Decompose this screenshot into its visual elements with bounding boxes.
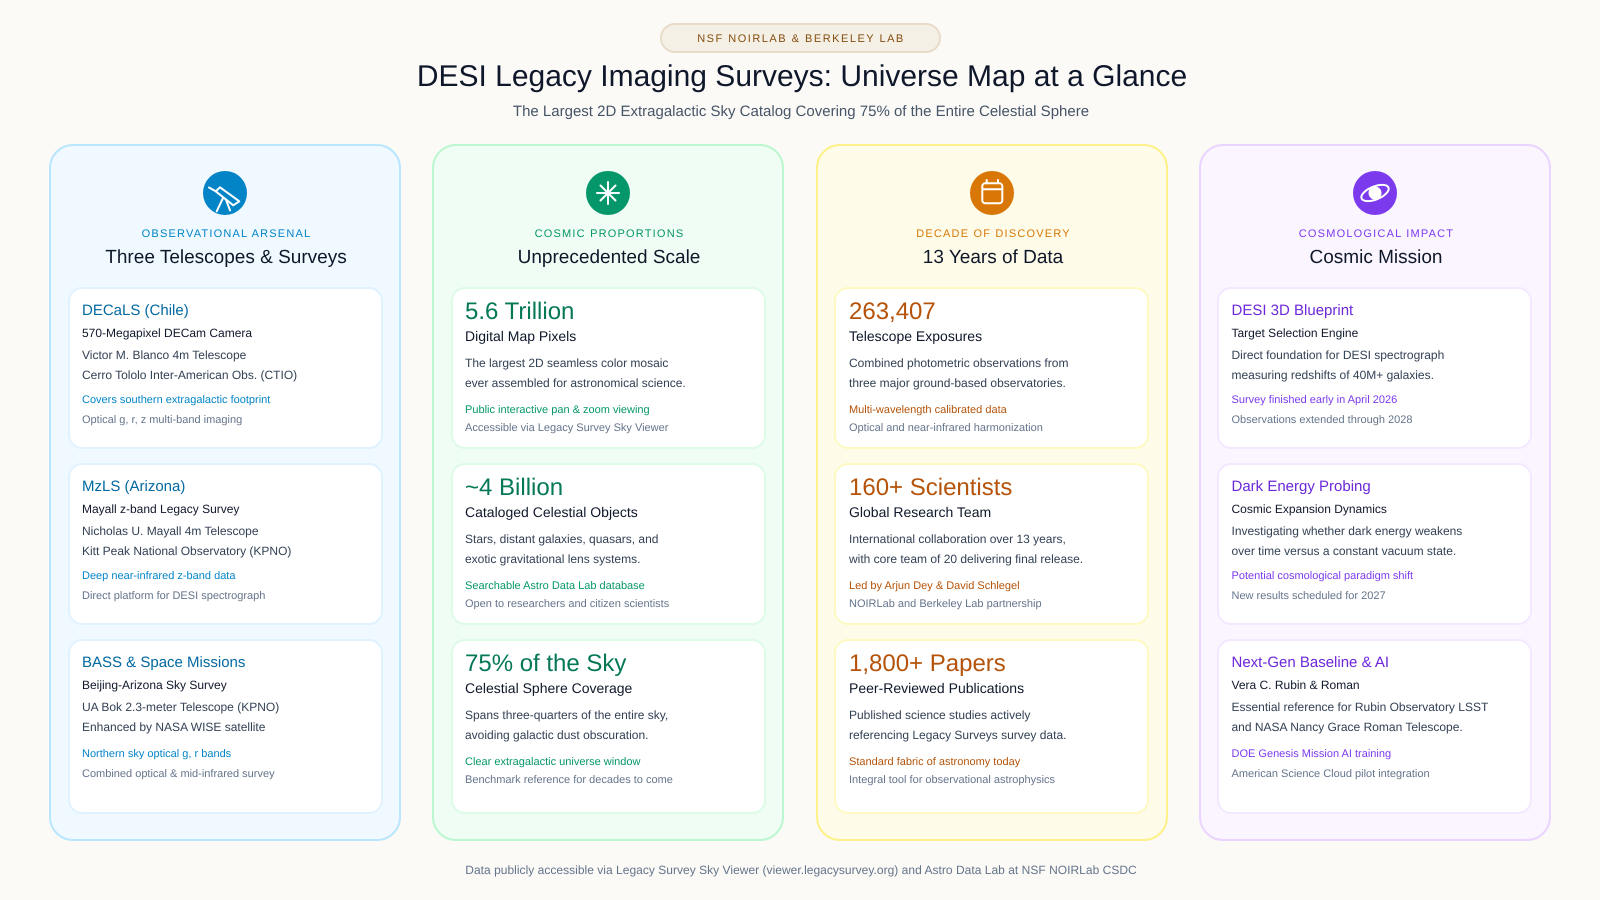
card heading: MzLS (Arizona) xyxy=(82,478,185,495)
card subheading: Cosmic Expansion Dynamics xyxy=(1232,502,1387,516)
card subheading: Vera C. Rubin & Roman xyxy=(1232,678,1360,692)
note: NOIRLab and Berkeley Lab partnership xyxy=(849,598,1042,610)
card heading: DESI 3D Blueprint xyxy=(1232,302,1353,319)
detail line: ever assembled for astronomical science. xyxy=(465,376,686,390)
note: American Science Cloud pilot integration xyxy=(1232,768,1430,780)
highlight: Led by Arjun Dey & David Schlegel xyxy=(849,580,1020,592)
detail line: Cerro Tololo Inter-American Obs. (CTIO) xyxy=(82,368,297,382)
note: Combined optical & mid-infrared survey xyxy=(82,768,275,780)
icon: ringed planet xyxy=(1353,171,1397,215)
panel: decade of discovery xyxy=(816,144,1168,841)
icon: calendar xyxy=(970,171,1014,215)
stat label: Cataloged Celestial Objects xyxy=(465,504,638,520)
detail line: avoiding galactic dust obscuration. xyxy=(465,728,648,742)
badge: NSF NOIRLab & Berkeley Lab: NSF NOIRLAB & BERKELEY LAB xyxy=(697,33,905,45)
note: Optical g, r, z multi-band imaging xyxy=(82,414,242,426)
detail line: Investigating whether dark energy weakens xyxy=(1232,524,1462,538)
stat label: Peer-Reviewed Publications xyxy=(849,680,1024,696)
card heading: Dark Energy Probing xyxy=(1232,478,1371,495)
highlight: Public interactive pan & zoom viewing xyxy=(465,404,650,416)
card heading: BASS & Space Missions xyxy=(82,654,245,671)
note: Observations extended through 2028 xyxy=(1232,414,1413,426)
note: Integral tool for observational astrophysics xyxy=(849,774,1055,786)
stat card: 5.6 Trillion xyxy=(451,287,766,449)
detail line: Published science studies actively xyxy=(849,708,1030,722)
stat card: 263,407 xyxy=(834,287,1149,449)
panel heading: Cosmic Mission xyxy=(1309,246,1443,268)
stat value: ~4 Billion xyxy=(465,474,563,501)
card subheading: Beijing-Arizona Sky Survey xyxy=(82,678,227,692)
card subheading: Mayall z-band Legacy Survey xyxy=(82,502,239,516)
detail line: Essential reference for Rubin Observatory LSST xyxy=(1232,700,1488,714)
detail line: Direct foundation for DESI spectrograph xyxy=(1232,348,1444,362)
detail line: with core team of 20 delivering final release. xyxy=(849,552,1083,566)
note: Direct platform for DESI spectrograph xyxy=(82,590,265,602)
stat value: 75% of the Sky xyxy=(465,650,626,677)
card heading: DECaLS (Chile) xyxy=(82,302,189,319)
detail line: three major ground-based observatories. xyxy=(849,376,1066,390)
stat label: Celestial Sphere Coverage xyxy=(465,680,632,696)
detail line: Spans three-quarters of the entire sky, xyxy=(465,708,668,722)
panel eyebrow: COSMOLOGICAL IMPACT xyxy=(1299,228,1454,240)
detail line: Stars, distant galaxies, quasars, and xyxy=(465,532,658,546)
title: DESI Legacy Imaging Surveys: Universe Map at a Glance xyxy=(417,60,1187,93)
stat value: 160+ Scientists xyxy=(849,474,1012,501)
stat card: 160+ Scientists xyxy=(834,463,1149,625)
highlight: Potential cosmological paradigm shift xyxy=(1232,570,1413,582)
highlight: Searchable Astro Data Lab database xyxy=(465,580,645,592)
icon: asterisk star xyxy=(586,171,630,215)
highlight: Standard fabric of astronomy today xyxy=(849,756,1020,768)
detail line: and NASA Nancy Grace Roman Telescope. xyxy=(1232,720,1463,734)
detail line: exotic gravitational lens systems. xyxy=(465,552,640,566)
panel heading: Three Telescopes & Surveys xyxy=(105,246,347,268)
note: Optical and near-infrared harmonization xyxy=(849,422,1043,434)
panel: observational arsenal xyxy=(49,144,401,841)
card: MzLS xyxy=(68,463,383,625)
note: Open to researchers and citizen scientists xyxy=(465,598,669,610)
detail line: Combined photometric observations from xyxy=(849,356,1068,370)
panel heading: 13 Years of Data xyxy=(923,246,1063,268)
detail line: Kitt Peak National Observatory (KPNO) xyxy=(82,544,291,558)
stat card: 75% of the sky xyxy=(451,639,766,814)
detail line: International collaboration over 13 years, xyxy=(849,532,1066,546)
highlight: Deep near-infrared z-band data xyxy=(82,570,235,582)
card: Dark Energy Probing xyxy=(1217,463,1532,625)
panel: cosmological impact xyxy=(1199,144,1551,841)
note: Benchmark reference for decades to come xyxy=(465,774,673,786)
panel eyebrow: DECADE OF DISCOVERY xyxy=(916,228,1071,240)
card subheading: Target Selection Engine xyxy=(1232,326,1358,340)
panel eyebrow: OBSERVATIONAL ARSENAL xyxy=(142,228,311,240)
stat value: 5.6 Trillion xyxy=(465,298,574,325)
detail line: UA Bok 2.3-meter Telescope (KPNO) xyxy=(82,700,279,714)
icon: telescope xyxy=(203,171,247,215)
highlight: Covers southern extragalactic footprint xyxy=(82,394,270,406)
detail line: Nicholas U. Mayall 4m Telescope xyxy=(82,524,259,538)
badge: NSF NOIRLab & Berkeley Lab xyxy=(660,23,940,53)
highlight: Clear extragalactic universe window xyxy=(465,756,640,768)
stat card: 4 Billion xyxy=(451,463,766,625)
detail line: referencing Legacy Surveys survey data. xyxy=(849,728,1066,742)
detail line: The largest 2D seamless color mosaic xyxy=(465,356,668,370)
stat label: Digital Map Pixels xyxy=(465,328,576,344)
detail line: measuring redshifts of 40M+ galaxies. xyxy=(1232,368,1434,382)
detail line: Enhanced by NASA WISE satellite xyxy=(82,720,265,734)
stat value: 1,800+ Papers xyxy=(849,650,1006,677)
card: DESI 3D Blueprint xyxy=(1217,287,1532,449)
stat card: 1,800+ Papers xyxy=(834,639,1149,814)
card: Next-Gen Baseline & AI xyxy=(1217,639,1532,814)
panel heading: Unprecedented Scale xyxy=(518,246,700,268)
footer note: Data publicly accessible via Legacy Survey Sky Viewer (viewer.legacysurvey.org) and Astro Data Lab at NSF NOIRLab CSDC xyxy=(465,863,1137,877)
subtitle: The Largest 2D Extragalactic Sky Catalog Covering 75% of the Entire Celestial Sphere xyxy=(513,103,1089,120)
note: New results scheduled for 2027 xyxy=(1232,590,1386,602)
card subheading: 570-Megapixel DECam Camera xyxy=(82,326,252,340)
highlight: DOE Genesis Mission AI training xyxy=(1232,748,1391,760)
stat label: Telescope Exposures xyxy=(849,328,982,344)
panel: cosmic proportions xyxy=(432,144,784,841)
highlight: Survey finished early in April 2026 xyxy=(1232,394,1397,406)
note: Accessible via Legacy Survey Sky Viewer xyxy=(465,422,668,434)
highlight: Multi-wavelength calibrated data xyxy=(849,404,1007,416)
detail line: Victor M. Blanco 4m Telescope xyxy=(82,348,246,362)
stat label: Global Research Team xyxy=(849,504,991,520)
card: DECaLS xyxy=(68,287,383,449)
detail line: over time versus a constant vacuum state. xyxy=(1232,544,1456,558)
panel eyebrow: COSMIC PROPORTIONS xyxy=(535,228,684,240)
card heading: Next-Gen Baseline & AI xyxy=(1232,654,1389,671)
card: BASS xyxy=(68,639,383,814)
stat value: 263,407 xyxy=(849,298,936,325)
highlight: Northern sky optical g, r bands xyxy=(82,748,231,760)
